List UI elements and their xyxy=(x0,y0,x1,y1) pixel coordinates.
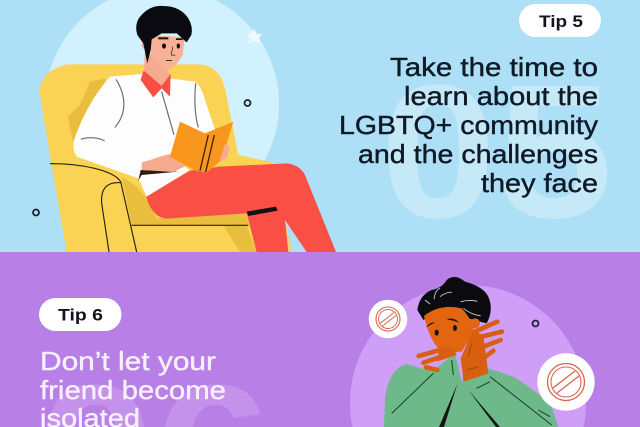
icon: ring dot xyxy=(532,320,538,326)
icon: ring dot left xyxy=(33,210,39,216)
sweater xyxy=(384,353,558,427)
tip 5 text: learn about the xyxy=(404,81,598,111)
ear xyxy=(470,318,480,328)
face xyxy=(424,307,474,353)
tip 5 text: and the challenges xyxy=(358,139,598,169)
tip 6 text: friend become xyxy=(40,375,226,405)
illustration: man reading in armchair xyxy=(40,6,336,252)
eyes xyxy=(158,37,183,61)
icon: star xyxy=(246,29,262,44)
belt xyxy=(138,170,178,181)
face xyxy=(151,35,185,71)
tip 5 text: Take the time to xyxy=(390,52,598,82)
hair highlights xyxy=(425,288,481,316)
tip 5 text xyxy=(339,52,598,198)
ghost number 05: 05 xyxy=(380,46,613,258)
armchair xyxy=(40,64,292,252)
icon: prohibited small xyxy=(369,300,407,338)
tip 5 text: they face xyxy=(481,168,598,198)
neck and wrist xyxy=(462,360,488,382)
panel: tip 6 xyxy=(0,252,640,427)
hand xyxy=(142,154,187,172)
shirt xyxy=(73,74,216,197)
hair xyxy=(136,6,192,63)
tip 6 text: Don’t let your xyxy=(40,346,216,376)
illustration: worried person xyxy=(384,277,558,427)
hair xyxy=(417,277,491,323)
panel: tip 5 xyxy=(0,0,640,258)
background circle xyxy=(45,0,279,221)
icon: prohibited large xyxy=(537,353,595,411)
tip 6 text xyxy=(40,346,226,427)
trousers xyxy=(146,163,336,252)
hands xyxy=(419,322,502,382)
sock band xyxy=(247,207,278,216)
eyes xyxy=(426,319,459,336)
background circle xyxy=(350,285,586,427)
book xyxy=(170,122,233,173)
collar xyxy=(141,71,171,97)
tip 5 badge xyxy=(519,4,601,37)
tip 6 badge: Tip 6 xyxy=(58,306,103,324)
tip 5 text: LGBTQ+ community xyxy=(339,110,598,140)
icon: ring dot xyxy=(244,100,250,106)
ear xyxy=(142,40,152,50)
tip 6 badge xyxy=(39,298,122,331)
neck xyxy=(144,50,170,86)
tip 5 badge: Tip 5 xyxy=(539,12,583,31)
other hand xyxy=(219,144,230,162)
